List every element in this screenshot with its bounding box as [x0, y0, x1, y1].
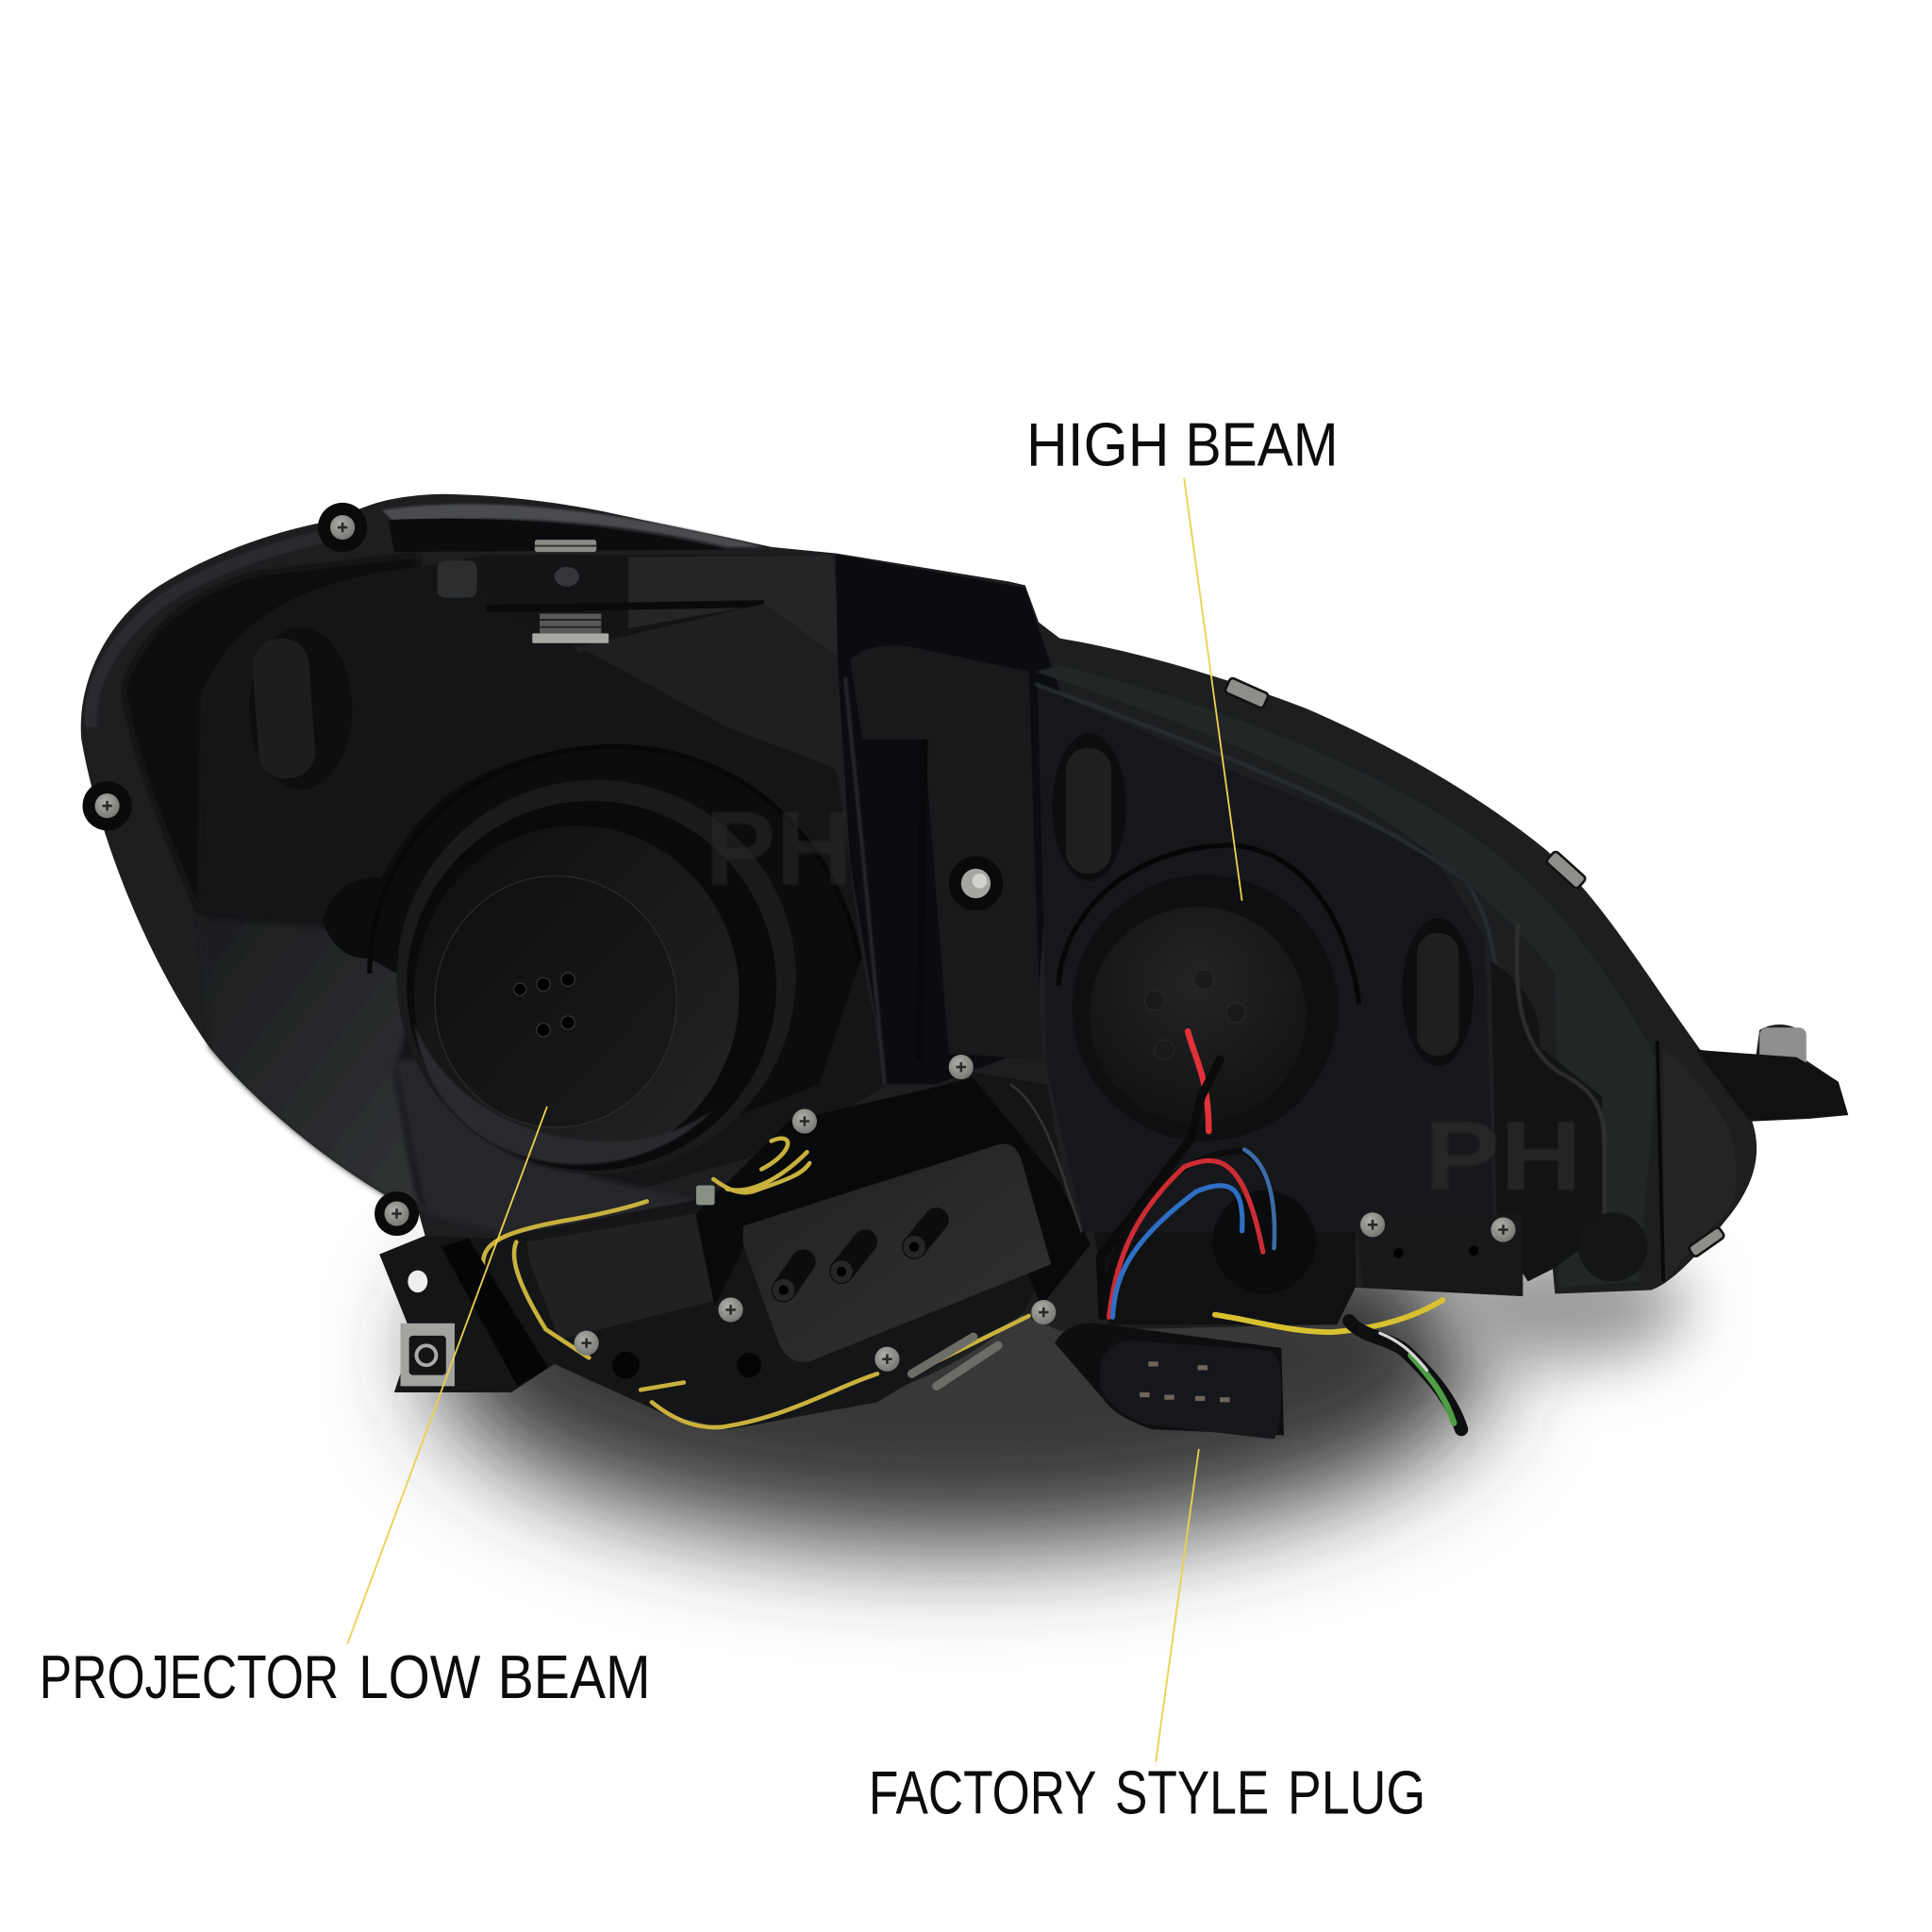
lens strip reflection [382, 504, 764, 547]
cap vent holes [514, 973, 575, 1037]
crimp connectors [912, 1337, 998, 1386]
wiring module [425, 1072, 1091, 1429]
callout leader: high beam [1184, 478, 1242, 901]
colored wire bundle [1100, 1031, 1461, 1429]
black recess around cap [323, 746, 860, 1171]
yellow and green lead wires [1215, 1300, 1442, 1332]
cap rings [397, 780, 796, 1174]
label: projector low beam: LOW [358, 1642, 481, 1711]
label: projector low beam [40, 1642, 651, 1711]
label: projector low beam: BEAM [498, 1642, 651, 1711]
housing silhouette [81, 494, 1848, 1429]
watermark: left PH: PH [705, 789, 853, 908]
module posts [773, 1220, 937, 1301]
label: high beam [1026, 410, 1338, 479]
left inner panel [204, 555, 887, 1232]
screws and bolts [83, 503, 1516, 1372]
callout leader: factory style plug [1156, 1449, 1199, 1762]
centre block [836, 555, 1059, 1084]
lower black housing [425, 1072, 1072, 1429]
large module box [743, 1144, 1051, 1362]
top left rim highlight [91, 536, 326, 727]
metal clip [400, 1324, 455, 1386]
electrical connector plug [1055, 1324, 1284, 1440]
top mounting hardware [438, 540, 608, 643]
cable tie [696, 1185, 715, 1205]
lower left lit surface [201, 918, 431, 1214]
left mounting bracket [379, 1236, 555, 1392]
right panel [1038, 685, 1493, 1232]
label: high beam: HIGH [1026, 410, 1170, 479]
label: factory style plug: STYLE [1115, 1758, 1269, 1827]
headlight housing [81, 494, 1848, 1429]
lower wire bay [1094, 1232, 1356, 1324]
label: high beam: BEAM [1185, 410, 1338, 479]
high beam rubber cap [1058, 845, 1359, 1141]
right mounting arm [1695, 1027, 1848, 1122]
right mounting bracket [1356, 1212, 1522, 1296]
shadow under headlight [431, 1164, 1688, 1546]
callout leader: projector low beam [347, 1107, 547, 1643]
left module box [526, 1214, 713, 1340]
yellow wires [483, 1139, 1029, 1427]
label: projector low beam: PROJECTOR [40, 1642, 339, 1711]
left inner dark channel [124, 555, 419, 918]
metal retaining clips [1224, 677, 1725, 1257]
adjuster pins [249, 627, 1474, 1066]
label: factory style plug: PLUG [1288, 1758, 1425, 1827]
label: factory style plug [869, 1758, 1425, 1827]
upper right rim [1035, 665, 1657, 1288]
top hardware plate [480, 555, 842, 660]
projector low beam dust cap [323, 746, 860, 1174]
label: factory style plug: FACTORY [869, 1758, 1096, 1827]
watermark: right PH: PH [1424, 1102, 1582, 1212]
